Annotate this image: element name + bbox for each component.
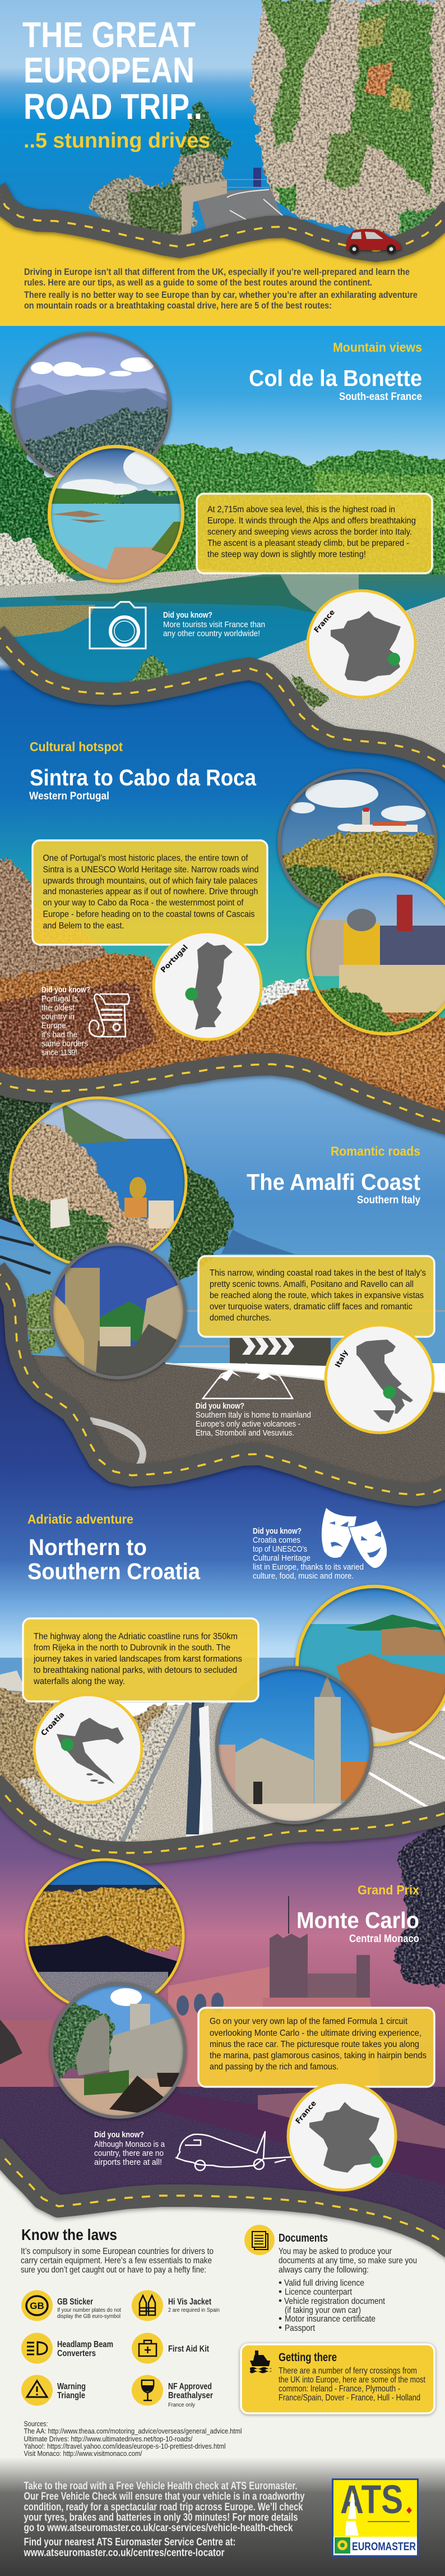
palace lower block xyxy=(263,1998,381,2092)
item: breathalyser xyxy=(132,2375,213,2408)
white kerb xyxy=(199,1705,213,1834)
photo circle: Positano xyxy=(9,1097,188,1273)
text box: Sintra: and Belem to the east. xyxy=(43,921,124,931)
did you know: Croatia: Croatia comes xyxy=(253,1535,300,1545)
text box: Amalfi: be reached along the route, which takes in expansive vistas xyxy=(210,1291,424,1300)
road 6 xyxy=(0,2146,445,2251)
text: You may be asked to produce your xyxy=(279,2247,392,2256)
intro text: on mountain roads or a breathtaking coastal drive, here are 5 of the best routes: xyxy=(24,301,332,311)
item: hi vis jacket: 2 are required in Spain xyxy=(168,2307,220,2313)
plaza xyxy=(216,1804,373,1826)
text box: Sintra: Sintra is a UNESCO World Heritage site. Narrow roads wind xyxy=(43,865,259,875)
logo: ATS Euromaster xyxy=(333,2478,418,2556)
far hillside xyxy=(62,1102,130,1144)
did you know: Croatia: list in Europe, thanks to its varied xyxy=(253,1562,364,1572)
sources xyxy=(24,2420,242,2458)
dark harbour water xyxy=(28,1935,185,1980)
did you know: Italy: Southern Italy is home to mainland xyxy=(196,1410,311,1420)
heading line 1: Northern to xyxy=(29,1534,147,1560)
palace tower xyxy=(270,1934,308,1998)
item: headlamp beam converters: Converters xyxy=(57,2349,96,2358)
title line 1: THE GREAT xyxy=(22,15,196,55)
forecourt xyxy=(0,2087,445,2255)
did you know: Portugal: Portugal is xyxy=(41,994,78,1004)
ground xyxy=(50,2078,188,2120)
lane line xyxy=(369,1742,445,1807)
did you know: Croatia: top of UNESCO’s xyxy=(253,1544,307,1554)
text xyxy=(279,2247,417,2275)
road surface xyxy=(199,1703,445,1851)
did you know: Portugal: Europe - xyxy=(41,1021,71,1031)
palace right wing xyxy=(308,1974,370,2008)
cliff vegetation xyxy=(263,0,437,233)
text box: Monte Carlo: Go on your very own lap of the famed Formula 1 circuit xyxy=(210,2017,407,2026)
text: documents at any time, so make sure you xyxy=(279,2256,417,2265)
item: warning triangle: Triangle xyxy=(57,2391,85,2400)
icon: theatre masks xyxy=(322,1508,387,1568)
sea xyxy=(9,1139,188,1223)
item: warning triangle: Warning xyxy=(57,2382,86,2391)
asphalt road xyxy=(31,1355,445,1484)
headland xyxy=(221,1230,295,1254)
did you know: Italy: Did you know? xyxy=(196,1401,244,1411)
surf xyxy=(260,977,310,1006)
clouds xyxy=(31,357,154,376)
text box: Monte Carlo: minus the race car. The picturesque route takes you along xyxy=(210,2040,419,2049)
footer text: Take to the road with a Free Vehicle Health check at ATS Euromaster. xyxy=(24,2481,297,2492)
intro: sure you don’t get caught out or have to pay a hefty fine: xyxy=(21,2265,206,2275)
text box: Col de la Bonette: Europe. It winds through the Alps and offers breathtaking xyxy=(207,516,416,526)
sources: The AA: http://www.theaa.com/motoring_advice/overseas/general_advice.html xyxy=(24,2427,242,2435)
did you know: Croatia: culture, food, music and more. xyxy=(253,1571,354,1581)
photo circle: Dubrovnik xyxy=(296,1585,445,1750)
sources: Yahoo!: https://travel.yahoo.com/ideas/europe-s-10-prettiest-drives.html xyxy=(24,2442,225,2450)
guard rail slope xyxy=(136,1704,192,1842)
heading: Monte Carlo xyxy=(296,1907,419,1933)
subtitle: ..5 stunning drives xyxy=(24,129,210,153)
panel: Col de la Bonette background xyxy=(0,326,445,785)
map: Croatia: Croatia xyxy=(40,1710,66,1738)
green hillside xyxy=(98,1301,149,1341)
category: Cultural hotspot xyxy=(30,739,123,754)
did you know: Italy: Etna, Stromboli and Vesuvius. xyxy=(196,1428,294,1438)
heading: Know the laws xyxy=(21,2226,117,2243)
text box: Croatia xyxy=(23,1618,258,1701)
item: breathalyser: France only xyxy=(168,2402,196,2408)
icon: scroll xyxy=(89,994,129,1037)
title xyxy=(22,15,210,153)
rock wall xyxy=(230,1338,331,1366)
did you know: Italy: Europe’s only active volcanoes - xyxy=(196,1419,300,1429)
checklist: Licence counterpart xyxy=(285,2288,352,2297)
text box: Amalfi: domed churches. xyxy=(210,1313,271,1323)
sources: Sources: xyxy=(24,2420,48,2428)
item: GB sticker: If your number plates do not xyxy=(57,2307,121,2313)
pale rock foreground xyxy=(359,1722,445,1750)
item: breathalyser: Breathalyser xyxy=(168,2391,213,2400)
lake xyxy=(0,574,445,709)
forest hills xyxy=(0,394,445,578)
footer text: www.atseuromaster.co.uk/centres/centre-locator xyxy=(24,2547,225,2559)
slate wing xyxy=(380,926,445,968)
text: There are a number of ferry crossings from xyxy=(279,2366,417,2376)
item: breathalyser: NF Approved xyxy=(168,2382,212,2391)
yellow intro band xyxy=(0,188,445,326)
logo: ATS Euromaster: ATS xyxy=(340,2478,403,2522)
photo circle: Monaco harbour xyxy=(25,1859,188,2017)
left building xyxy=(50,1290,84,1386)
road sign and railing xyxy=(253,168,261,187)
footer text: condition, ready for a spectacular road trip across Europe. We’ll check xyxy=(24,2501,303,2513)
dark gutter xyxy=(186,1703,205,1834)
text box: Sintra: on your way to Cabo da Roca - the westernmost point of xyxy=(43,898,244,908)
text box: Col de la Bonette: The ascent is a pleasant steady climb, but be prepared - xyxy=(207,539,409,548)
text box: Sintra xyxy=(33,840,267,945)
did you know: Portugal: Did you know? xyxy=(41,985,90,995)
panel: Amalfi background xyxy=(0,1075,445,1484)
heading: Sintra to Cabo da Roca xyxy=(30,765,257,790)
text box: Monte Carlo: and passing by the rich and famous. xyxy=(210,2062,339,2072)
panel: getting there xyxy=(241,2344,434,2413)
location: Central Monaco xyxy=(349,1933,419,1945)
panel: getting there: common: Ireland - France, Plymouth - xyxy=(279,2384,400,2394)
cathedral facade xyxy=(140,1282,191,1346)
cliff face xyxy=(251,0,445,241)
white limestone rocks xyxy=(0,533,84,586)
clouds xyxy=(290,780,426,831)
did you know: Portugal: it’s had the xyxy=(41,1030,77,1039)
terracotta rooftops xyxy=(336,1654,445,1747)
clouds xyxy=(62,449,174,495)
did you know: Croatia: Cultural Heritage xyxy=(253,1553,310,1563)
panel: know the laws background xyxy=(0,2146,445,2576)
footer text xyxy=(24,2481,305,2559)
did you know: Portugal: since 1139! xyxy=(41,1048,77,1057)
title line 2: EUROPEAN xyxy=(24,50,194,90)
did you know: France: any other country worldwide! xyxy=(163,629,260,638)
did you know: France: Did you know? xyxy=(163,610,212,620)
door xyxy=(253,1782,262,1804)
text box: Sintra: Europe - before heading on to the coastal towns of Cascais xyxy=(43,910,254,919)
road 4 xyxy=(0,1269,445,1495)
text box: Croatia: from Rijeka in the north to Dubrovnik in the south. The xyxy=(34,1643,230,1653)
did you know: Croatia xyxy=(253,1526,364,1581)
arched windows xyxy=(177,1993,224,2016)
photo circle: Monaco palace and cannonballs xyxy=(50,1982,188,2120)
text box: Sintra: One of Portugal’s most historic places, the entire town of xyxy=(43,854,248,863)
intro xyxy=(21,2247,214,2275)
map: France (Monaco) xyxy=(288,2082,396,2190)
castle tower and wall xyxy=(130,2004,150,2037)
panel: Monte Carlo heading xyxy=(296,1883,419,1945)
panel: hero photo background xyxy=(0,0,445,258)
location: Southern Italy xyxy=(357,1194,420,1206)
heading: Documents xyxy=(279,2232,328,2244)
map: Croatia xyxy=(34,1695,142,1802)
heading: Col de la Bonette xyxy=(249,365,422,391)
map: France (Monaco): France xyxy=(294,2099,318,2126)
did you know: Croatia: Did you know? xyxy=(253,1526,302,1536)
item: hi vis jacket: Hi Vis Jacket xyxy=(168,2297,212,2307)
pine tree right xyxy=(168,1156,235,1285)
item: GB sticker: GB xyxy=(30,2301,44,2311)
checklist: Passport xyxy=(285,2324,315,2333)
text box: Monte Carlo xyxy=(198,2008,434,2087)
yellow tower xyxy=(344,923,380,970)
item: warning triangle xyxy=(21,2375,86,2405)
icon: camera xyxy=(90,602,146,648)
panel: Sintra background xyxy=(0,634,445,1139)
map: Italy: Italy xyxy=(334,1349,350,1369)
dark tree right xyxy=(392,1812,445,1989)
road edge line xyxy=(165,1363,445,1392)
panel: Amalfi heading xyxy=(247,1144,420,1206)
text box: Monte Carlo: overlooking Monte Carlo - the ultimate driving experience, xyxy=(210,2028,421,2038)
location: Western Portugal xyxy=(29,790,109,802)
did you know: France xyxy=(163,610,265,638)
cream walls xyxy=(339,965,445,1013)
road 3 xyxy=(0,1064,445,1126)
lighthouse xyxy=(362,811,370,826)
category: Adriatic adventure xyxy=(27,1512,133,1526)
checklist xyxy=(279,2279,385,2333)
panel: Croatia heading xyxy=(27,1512,201,1584)
panel: Croatia background xyxy=(0,1268,445,1862)
text box: Amalfi: over turquoise waters, dramatic cliff faces and romantic xyxy=(210,1302,412,1312)
panel: documents xyxy=(244,2225,417,2333)
did you know: Monaco xyxy=(94,2130,165,2167)
footer text: go to www.atseuromaster.co.uk/car-services/vehicle-health-check xyxy=(24,2522,293,2534)
text box: Amalfi xyxy=(198,1256,434,1337)
sources: Ultimate Drives: http://www.ultimatedrives.net/top-10-roads/ xyxy=(24,2435,193,2443)
did you know: Monaco: Did you know? xyxy=(94,2130,144,2140)
map: Italy xyxy=(326,1325,433,1433)
item: GB sticker: GB Sticker xyxy=(57,2297,93,2307)
footer background xyxy=(0,2457,445,2576)
town on slope xyxy=(9,1122,185,1273)
map: France: France xyxy=(313,608,337,634)
marina boats xyxy=(34,1972,168,2017)
photo circle: Cabo da Roca lighthouse xyxy=(277,769,443,920)
road 5 xyxy=(0,1783,445,1853)
heading: The Amalfi Coast xyxy=(247,1169,420,1195)
icon: red car xyxy=(346,229,401,254)
did you know: France: More tourists visit France than xyxy=(163,620,265,629)
text box: Croatia: to breathtaking national parks, with detours to secluded xyxy=(34,1666,237,1675)
map: Portugal xyxy=(154,932,261,1039)
right buildings xyxy=(341,1761,369,1801)
white road curve xyxy=(90,1420,143,1474)
text box: Col de la Bonette: At 2,715m above sea level, this is the highest road in xyxy=(207,505,395,514)
category: Grand Prix xyxy=(358,1883,419,1897)
did you know: Portugal xyxy=(41,985,90,1057)
logo: ATS Euromaster: EUROMASTER xyxy=(352,2541,416,2553)
text: always carry the following: xyxy=(279,2265,369,2275)
gravel shore right xyxy=(256,597,445,785)
flag pole xyxy=(288,1896,289,1934)
panel: Col de la Bonette heading xyxy=(249,340,422,403)
white rocks xyxy=(17,1705,185,1851)
pine tree left xyxy=(0,1095,54,1223)
text box: Amalfi: pretty scenic towns. Amalfi, Positano and Ravello can all xyxy=(210,1280,414,1289)
did you know: Portugal: the oldest xyxy=(41,1003,75,1013)
church nave xyxy=(235,1738,314,1806)
item: first aid kit: First Aid Kit xyxy=(168,2344,210,2354)
island xyxy=(345,1614,445,1631)
trees xyxy=(307,987,445,1043)
guard rail xyxy=(120,1703,188,1846)
bell tower xyxy=(65,1268,100,1380)
did you know: Monaco: Although Monaco is a xyxy=(94,2140,165,2149)
foreground rocks and shrubs xyxy=(88,176,196,236)
brown hillside xyxy=(0,1687,168,1819)
clifftop rock xyxy=(0,857,150,979)
photo circle: turquoise lake xyxy=(48,446,185,583)
fort xyxy=(381,1627,445,1655)
intro: carry certain equipment. Here’s a few essentials to make xyxy=(21,2256,212,2265)
map: France xyxy=(308,591,415,697)
panel: Sintra heading xyxy=(29,739,257,802)
bell tower xyxy=(314,1697,341,1806)
footer text: Our Free Vehicle Check will ensure that your vehicle is in a roadworthy xyxy=(24,2491,305,2503)
location: South-east France xyxy=(339,391,422,403)
icon: ferry xyxy=(250,2350,271,2373)
heading line 2: Southern Croatia xyxy=(27,1558,201,1584)
item: GB sticker xyxy=(21,2290,121,2321)
did you know: Portugal: same borders xyxy=(41,1039,88,1048)
road 1 xyxy=(0,188,445,251)
photo circle: Amalfi cathedral xyxy=(50,1243,191,1386)
panel: know the laws xyxy=(21,2226,220,2408)
red clock tower xyxy=(397,895,412,931)
text box: Croatia: journey takes in varied landscapes from karst formations xyxy=(33,1654,242,1664)
title line 3: ROAD TRIP.. xyxy=(24,86,202,127)
text box: Croatia: waterfalls along the way. xyxy=(33,1677,125,1686)
lit buildings xyxy=(25,1888,185,1952)
palace building xyxy=(168,1967,270,2087)
gravel beach xyxy=(0,569,263,598)
item: headlamp beam converters: Headlamp Beam xyxy=(57,2340,113,2349)
did you know: Monaco: airports there at all! xyxy=(94,2158,162,2167)
tree xyxy=(52,2000,115,2076)
text box: Col de la Bonette: scenery and sweeping views across the border into Italy. xyxy=(207,527,412,537)
foliage by barrier xyxy=(25,1290,56,1352)
coastal road and wall xyxy=(196,188,286,233)
photo circle: Croatian church xyxy=(216,1667,373,1826)
text box: Sintra: upwards through mountains, out of which fairy tale palaces xyxy=(43,876,258,886)
text box: Monte Carlo: the marina, past glamorous casinos, taking in hairpin bends xyxy=(210,2051,427,2060)
did you know: Italy xyxy=(196,1401,311,1438)
tree left xyxy=(0,2020,22,2064)
sources: Visit Monaco: http://www.visitmonaco.com/ xyxy=(24,2450,142,2458)
item: headlamp beam converters xyxy=(21,2333,113,2364)
text box: Sintra: and monasteries appear as if out of nowhere. Drive through xyxy=(43,887,258,896)
small headland and pine xyxy=(170,149,227,196)
barrier rails xyxy=(28,1311,445,1346)
icon: airplane xyxy=(175,2132,291,2170)
domed church xyxy=(129,1177,146,1199)
flowering slope xyxy=(0,953,445,1111)
did you know: Monaco: country, there are no xyxy=(94,2149,164,2158)
heading: Getting there xyxy=(279,2351,337,2364)
text box: Col de la Bonette xyxy=(197,494,432,573)
category: Mountain views xyxy=(333,340,422,355)
left house xyxy=(217,1745,235,1795)
road 2 xyxy=(0,633,445,774)
checklist: Valid full driving licence xyxy=(284,2279,364,2288)
panel: Monaco background xyxy=(0,1778,445,2255)
text box: Croatia: The highway along the Adriatic coastline runs for 350km xyxy=(34,1632,238,1641)
intro text: rules. Here are our tips, as well as a guide to some of the best routes around the continent. xyxy=(24,278,372,288)
text box: Col de la Bonette: the steep way down is slightly more testing! xyxy=(207,550,366,559)
map: Portugal: Portugal xyxy=(159,944,190,974)
icon: documents xyxy=(244,2225,275,2255)
cannonball pyramid xyxy=(109,2076,168,2114)
icon: volcano mountains xyxy=(203,1364,293,1399)
tree branches xyxy=(0,1217,50,1273)
far rock xyxy=(0,1671,22,1691)
checklist: (if taking your own car) xyxy=(285,2306,361,2315)
checklist: Motor insurance certificate xyxy=(285,2315,376,2324)
footer text: Find your nearest ATS Euromaster Service Centre at: xyxy=(24,2537,235,2548)
chevrons xyxy=(242,1338,294,1355)
did you know: Portugal: country in xyxy=(41,1012,75,1022)
photo circle: Pena Palace xyxy=(307,874,445,1043)
statue xyxy=(76,2014,109,2076)
item: hi vis jacket xyxy=(132,2290,220,2321)
text box: Amalfi: This narrow, winding coastal road takes in the best of Italy’s xyxy=(210,1268,426,1278)
category: Romantic roads xyxy=(331,1144,420,1158)
item: first aid kit xyxy=(132,2333,210,2364)
intro: It’s compulsory in some European countries for drivers to xyxy=(21,2247,214,2256)
footer text: your tyres, brakes and batteries in only 30 minutes! For more details xyxy=(24,2512,298,2523)
item: GB sticker: display the GB euro-symbol xyxy=(57,2313,120,2320)
checklist: Vehicle registration document xyxy=(284,2297,385,2306)
intro text xyxy=(24,267,418,311)
photo circle: alpine mountains xyxy=(11,331,174,488)
shrubs xyxy=(129,654,171,687)
